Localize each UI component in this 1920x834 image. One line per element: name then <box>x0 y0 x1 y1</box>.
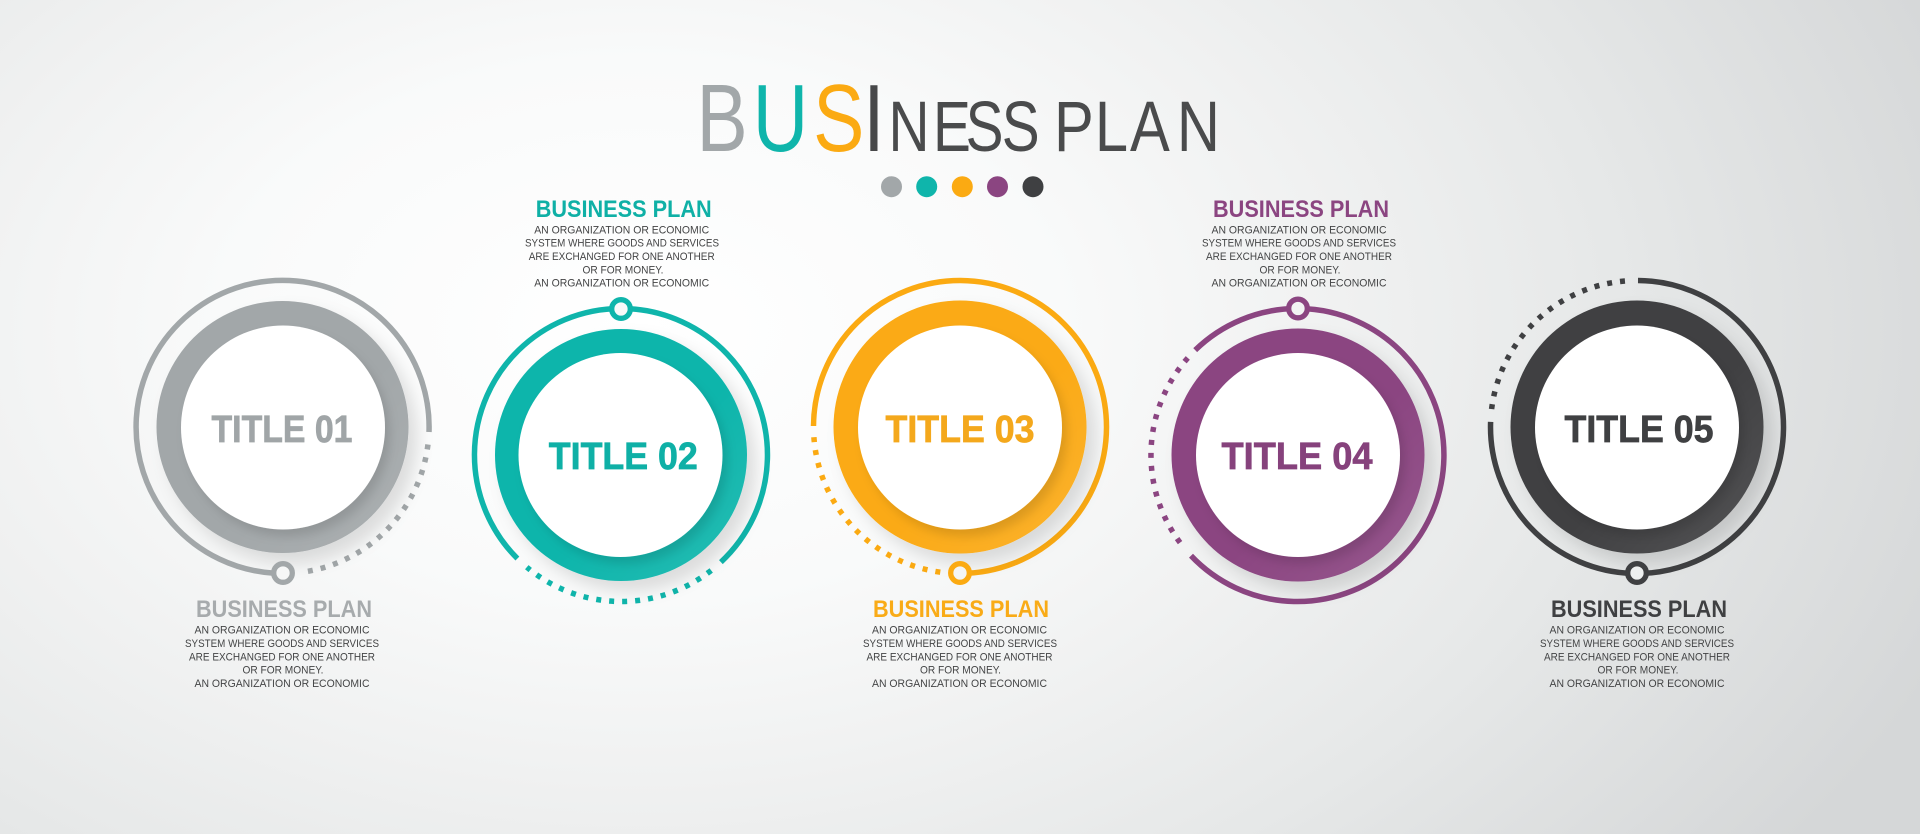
ring highlight <box>1172 328 1424 582</box>
text block: step 01: SYSTEM WHERE GOODS AND SERVICES <box>185 638 379 650</box>
label: title 02: TITLE 02 <box>549 436 698 478</box>
panel: step 03 <box>814 280 1106 690</box>
text block: step 03: AN ORGANIZATION OR ECONOMIC <box>872 624 1047 636</box>
ring highlight <box>1510 300 1764 554</box>
text block: step 05: AN ORGANIZATION OR ECONOMIC <box>1550 624 1725 636</box>
text block: step 03: OR FOR MONEY. <box>920 665 1001 677</box>
outer ring with dashed section <box>1151 309 1444 602</box>
main title: PLAN <box>1054 87 1220 166</box>
text block: step 03: BUSINESS PLAN <box>873 596 1049 623</box>
text block: step 02: AN ORGANIZATION OR ECONOMIC <box>534 278 709 290</box>
text block: step 01: OR FOR MONEY. <box>242 665 324 677</box>
label: title 05: TITLE 05 <box>1564 409 1714 451</box>
outer ring with dashed section <box>1491 280 1784 573</box>
label: title 04: TITLE 04 <box>1222 436 1372 478</box>
text block: step 01: AN ORGANIZATION OR ECONOMIC <box>194 678 370 690</box>
node <box>274 564 292 582</box>
text block: step 04: OR FOR MONEY. <box>1260 264 1340 276</box>
text block: step 01: ARE EXCHANGED FOR ONE ANOTHER <box>189 651 375 663</box>
ring disc <box>156 301 408 553</box>
node <box>612 300 630 318</box>
text block: step 04: BUSINESS PLAN <box>1213 196 1389 223</box>
text block: step 03: AN ORGANIZATION OR ECONOMIC <box>872 678 1047 690</box>
outer ring with dashed section <box>474 308 767 601</box>
node <box>1628 564 1646 582</box>
main title <box>696 65 1220 172</box>
text block: step 04 <box>1202 196 1396 290</box>
panel: step 05 <box>1491 280 1784 690</box>
text block: step 01 <box>185 596 379 690</box>
outer ring with dashed section <box>814 280 1106 574</box>
label: title 01: TITLE 01 <box>212 409 352 451</box>
text block: step 05: OR FOR MONEY. <box>1598 665 1678 677</box>
main title: NESS <box>888 87 1040 166</box>
main title: B <box>696 65 748 172</box>
label: title 03: TITLE 03 <box>886 409 1034 451</box>
main title: U <box>753 65 808 172</box>
inner white disc <box>1196 353 1400 557</box>
panel: step 04 <box>1151 196 1444 602</box>
text block: step 05 <box>1540 596 1734 690</box>
text block: step 02: BUSINESS PLAN <box>536 196 712 223</box>
panel: step 01 <box>136 280 429 690</box>
text block: step 01: BUSINESS PLAN <box>196 596 372 623</box>
text block: step 03: ARE EXCHANGED FOR ONE ANOTHER <box>866 651 1053 663</box>
text block: step 02: SYSTEM WHERE GOODS AND SERVICES <box>525 238 719 250</box>
inner white disc <box>518 353 722 557</box>
inner white disc <box>858 326 1062 530</box>
main title: I <box>863 65 885 172</box>
node <box>951 564 969 582</box>
text block: step 05: ARE EXCHANGED FOR ONE ANOTHER <box>1544 651 1730 663</box>
colour dots <box>881 176 1044 197</box>
text block: step 04: ARE EXCHANGED FOR ONE ANOTHER <box>1206 251 1392 263</box>
text block: step 05: AN ORGANIZATION OR ECONOMIC <box>1550 678 1725 690</box>
inner white disc <box>181 326 385 530</box>
inner white disc <box>1535 326 1739 530</box>
main title: S <box>813 65 864 172</box>
text block: step 02 <box>525 196 719 290</box>
ring disc <box>834 300 1086 554</box>
ring highlight <box>156 301 408 553</box>
text block: step 04: AN ORGANIZATION OR ECONOMIC <box>1212 224 1387 236</box>
text block: step 01: AN ORGANIZATION OR ECONOMIC <box>194 624 370 636</box>
node <box>1289 299 1307 318</box>
ring disc <box>1510 300 1764 554</box>
panel: step 02 <box>474 196 767 601</box>
ring disc <box>495 329 747 581</box>
text block: step 03 <box>863 596 1057 690</box>
ring highlight <box>495 329 747 581</box>
ring highlight <box>834 300 1086 554</box>
text block: step 02: OR FOR MONEY. <box>582 264 664 276</box>
ring disc <box>1172 328 1424 582</box>
text block: step 02: ARE EXCHANGED FOR ONE ANOTHER <box>529 251 715 263</box>
text block: step 05: BUSINESS PLAN <box>1551 596 1727 623</box>
text block: step 05: SYSTEM WHERE GOODS AND SERVICES <box>1540 638 1734 650</box>
outer ring with dashed section <box>136 280 429 573</box>
text block: step 03: SYSTEM WHERE GOODS AND SERVICES <box>863 638 1057 650</box>
text block: step 02: AN ORGANIZATION OR ECONOMIC <box>534 224 709 236</box>
text block: step 04: SYSTEM WHERE GOODS AND SERVICES <box>1202 238 1396 250</box>
text block: step 04: AN ORGANIZATION OR ECONOMIC <box>1212 278 1387 290</box>
